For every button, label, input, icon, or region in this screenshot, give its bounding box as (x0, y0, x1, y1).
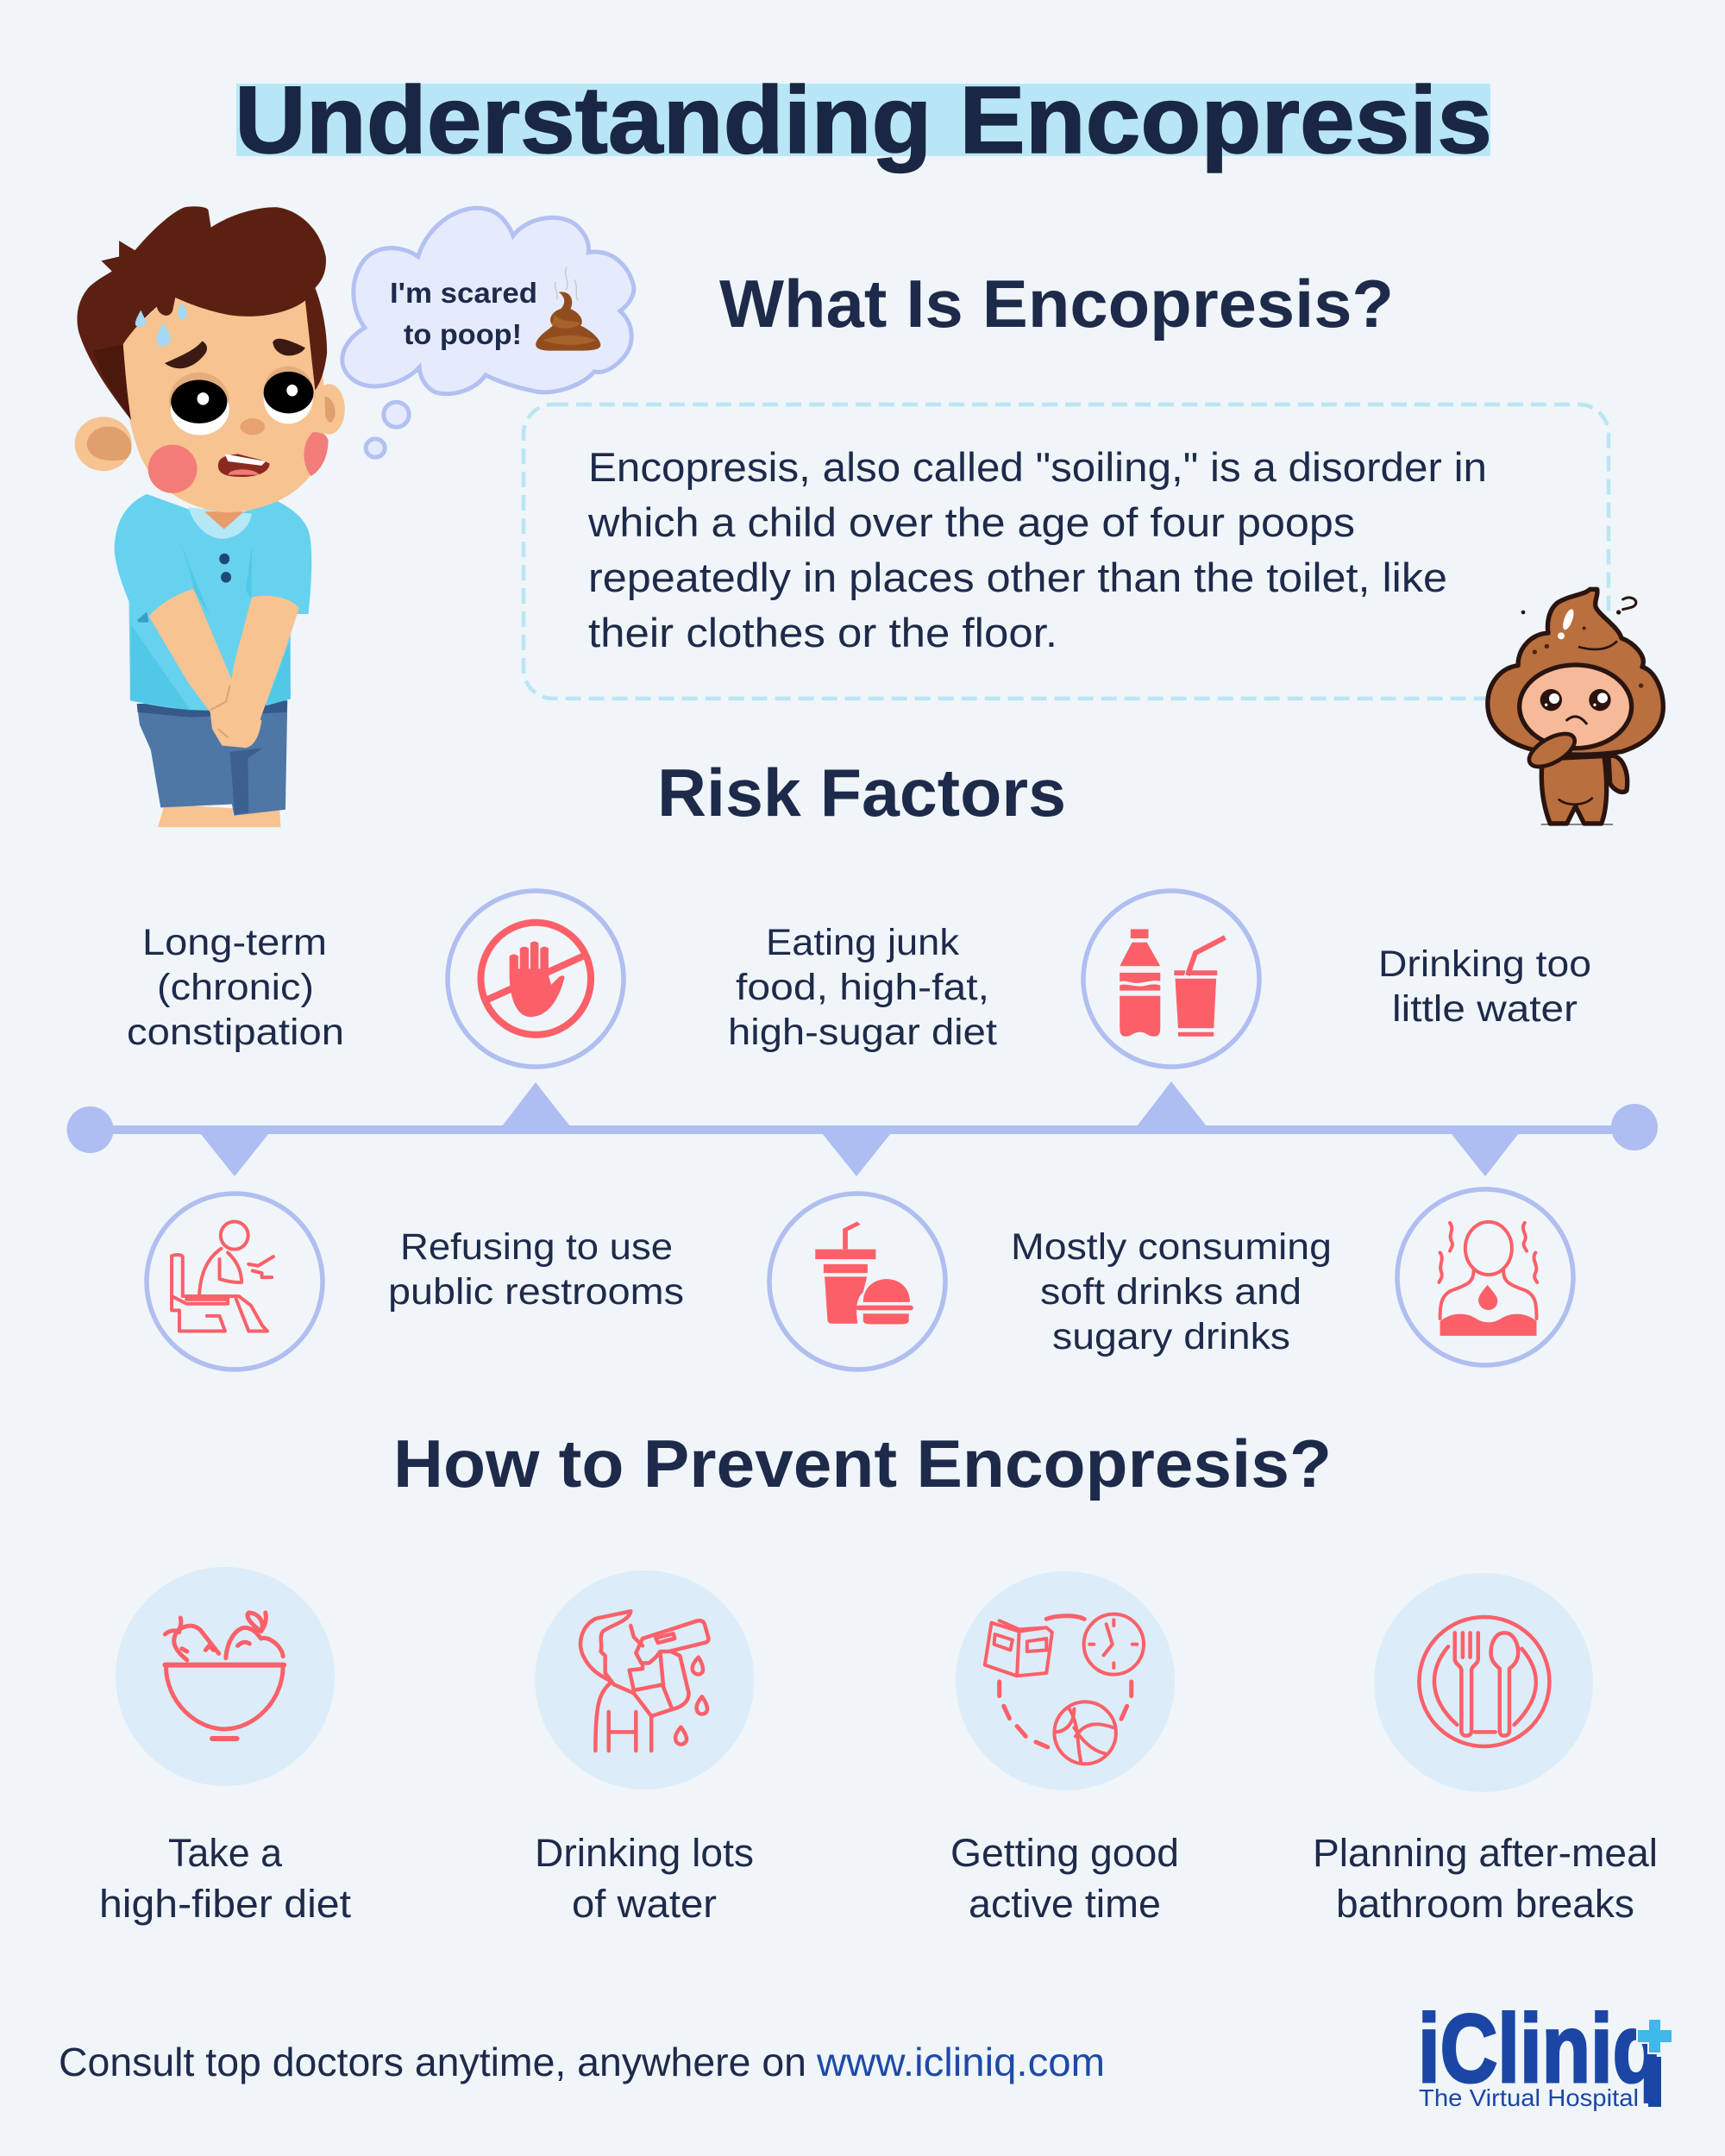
risk factor: too little water: little water (1392, 988, 1578, 1030)
prevention labels: high-fiber diet (99, 1882, 352, 1926)
risk factor: junk food diet: high-sugar diet (728, 1012, 997, 1053)
icon: stop hand in circle (448, 891, 624, 1067)
risk factor: junk food diet (728, 922, 997, 1053)
heading: risk factors: Risk Factors (657, 755, 1066, 830)
prevention labels: bathroom breaks (1336, 1882, 1634, 1926)
icon: sweating person in circle (1397, 1189, 1573, 1365)
risk factor: refusing public restrooms: public restrooms (388, 1271, 684, 1313)
right eye (264, 367, 314, 423)
prevention: active time (956, 1571, 1175, 1790)
risk factor: junk food diet: food, high-fat, (736, 967, 989, 1008)
prevention labels: Getting good (950, 1831, 1179, 1875)
prevention: high-fiber diet (116, 1567, 335, 1786)
footer call to action: Consult top doctors anytime, anywhere on (59, 2040, 806, 2084)
icon: toilet in circle (147, 1194, 323, 1369)
risk factor: chronic constipation: constipation (127, 1012, 344, 1053)
risk factor: chronic constipation: Long-term (142, 922, 327, 963)
definition text (587, 444, 1487, 655)
title: Understanding Encopresis (235, 67, 1492, 173)
icon: book, clock and ball (985, 1614, 1144, 1764)
definition text: their clothes or the floor. (588, 610, 1057, 655)
prevention labels: Planning after-meal (1313, 1831, 1658, 1875)
prevention labels: Drinking lots (535, 1831, 754, 1875)
icon: person drinking (580, 1611, 709, 1751)
risk factor: refusing public restrooms: Refusing to use (400, 1226, 673, 1268)
risk factor: mostly soft drinks: Mostly consuming (1011, 1226, 1332, 1268)
logo: iCliniq: The Virtual Hospital (1419, 2084, 1639, 2111)
left eye (169, 373, 229, 436)
risk factor: junk food diet: Eating junk (766, 922, 960, 963)
risk factor: refusing public restrooms (388, 1226, 684, 1313)
illustration: worried boy (75, 206, 345, 827)
risk factor: too little water: Drinking too (1378, 943, 1591, 985)
prevention: after-meal breaks (1374, 1573, 1593, 1792)
heading: what is encopresis: What Is Encopresis? (719, 266, 1394, 342)
icon: burger and drink in circle (769, 1194, 945, 1369)
icon: soda bottle and cup in circle (1083, 891, 1259, 1067)
definition text: repeatedly in places other than the toilet, like (588, 555, 1447, 600)
risk factor: too little water (1378, 943, 1591, 1030)
icon: poop emoji (536, 267, 600, 351)
thought bubble (342, 208, 634, 457)
prevention: drinking water (535, 1570, 754, 1789)
footer call to action: www.icliniq.com (816, 2040, 1105, 2084)
risk factor: mostly soft drinks: soft drinks and (1040, 1271, 1302, 1313)
risk factor: mostly soft drinks: sugary drinks (1052, 1316, 1290, 1357)
thought bubble: to poop! (404, 318, 522, 350)
timeline (67, 1081, 1658, 1176)
risk factor: chronic constipation: (chronic) (157, 967, 314, 1008)
risk factor: chronic constipation (127, 922, 344, 1053)
panel: definition box (524, 404, 1609, 699)
thought bubble: I'm scared (390, 277, 537, 309)
heading: how to prevent: How to Prevent Encopresis? (393, 1426, 1332, 1501)
icon: fruit bowl (165, 1613, 284, 1739)
prevention labels: Take a (168, 1831, 283, 1875)
icon: plate and cutlery (1419, 1617, 1549, 1746)
logo: iCliniq: iCliniq (1418, 1995, 1661, 2103)
prevention labels (99, 1831, 1658, 1926)
definition text: which a child over the age of four poops (587, 499, 1355, 545)
definition text: Encopresis, also called "soiling," is a disorder in (588, 444, 1487, 490)
prevention labels: of water (572, 1882, 717, 1926)
illustration: poop mascot (1488, 589, 1663, 824)
risk factor: mostly soft drinks (1011, 1226, 1332, 1357)
prevention labels: active time (969, 1882, 1161, 1926)
